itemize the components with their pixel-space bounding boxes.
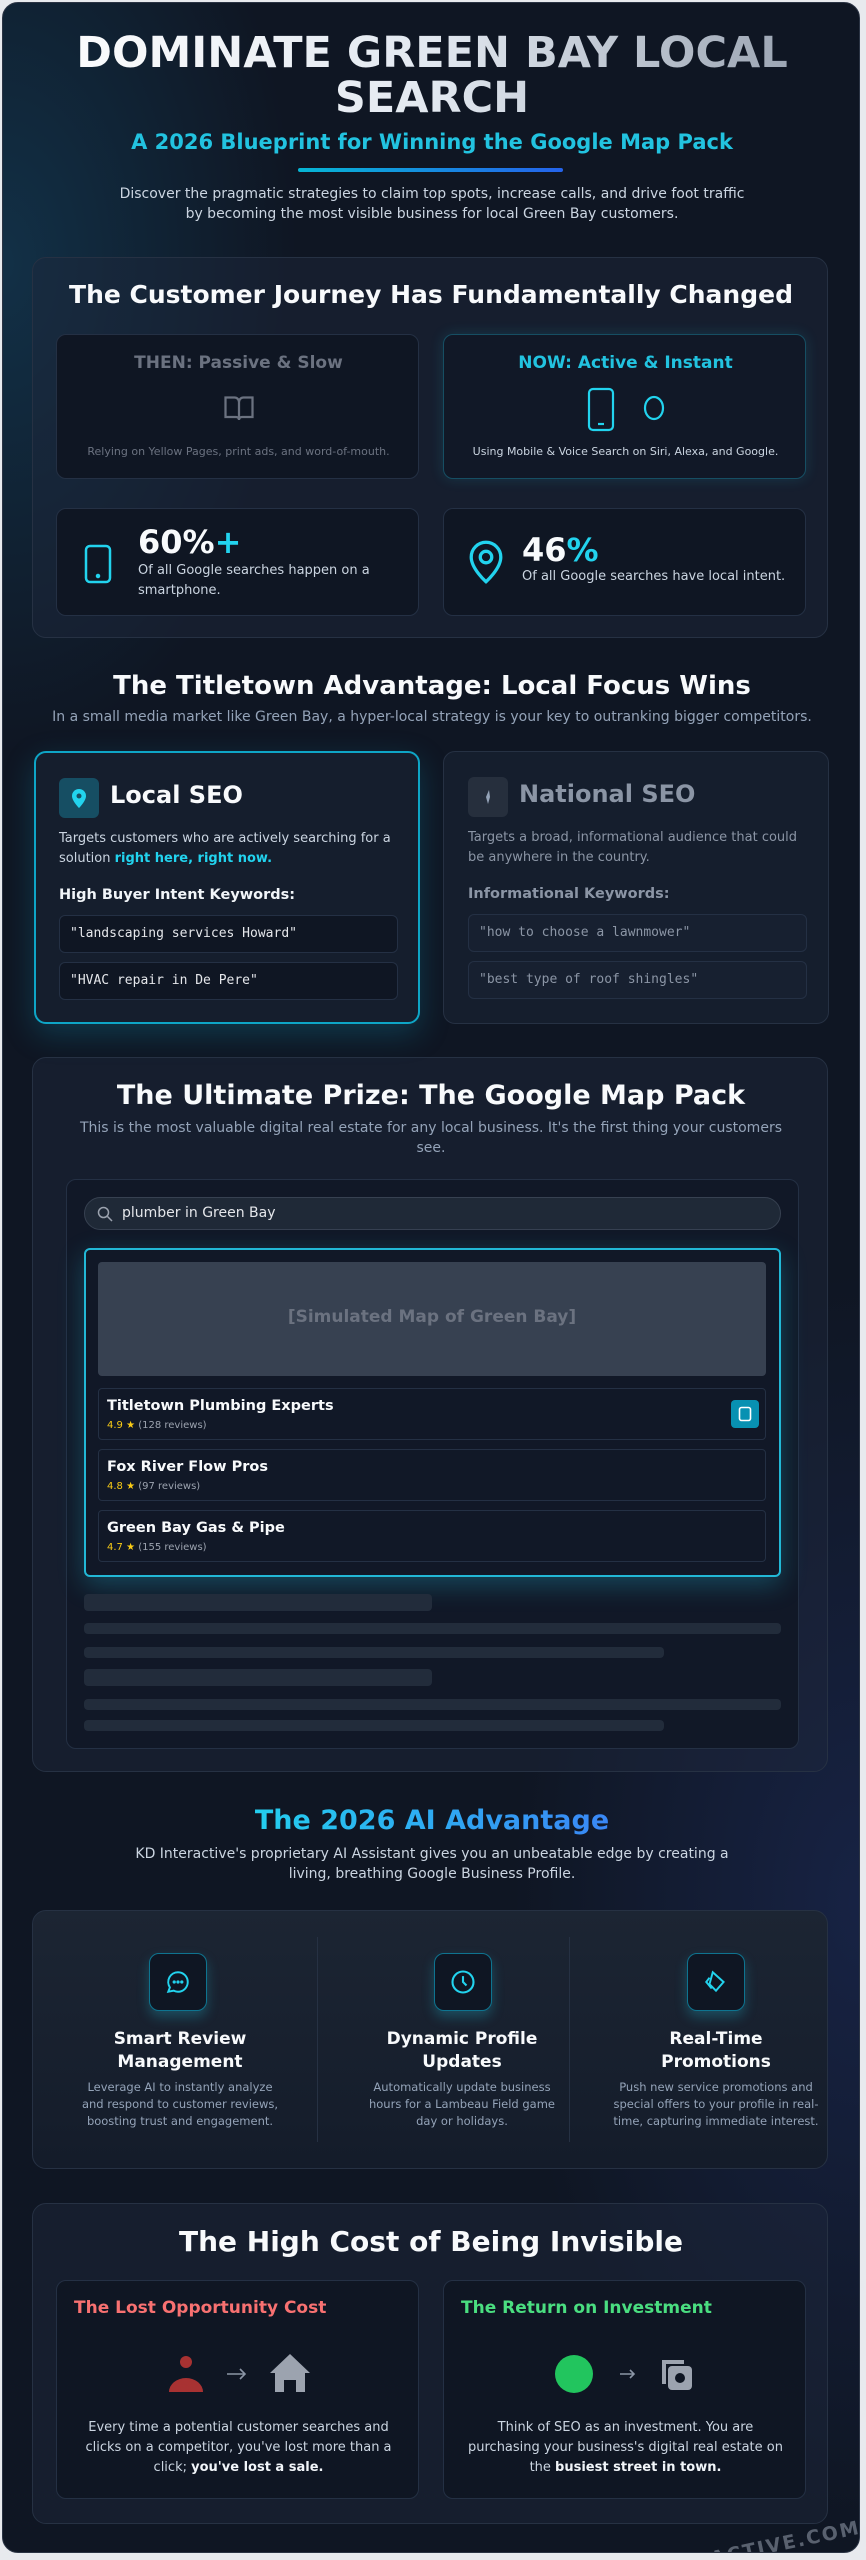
icon: action button (731, 1400, 759, 1428)
mock search results (66, 1179, 799, 1749)
stat: 46%: 46% (522, 531, 599, 569)
panel: map pack (32, 1057, 828, 1772)
card: local seo: Targets customers who are actively searching for a solution right here, right now. (59, 831, 391, 866)
card: local seo: "HVAC repair in De Pere" (70, 973, 258, 988)
listing 3: 4.7 ★ (155 reviews) (107, 1542, 207, 1553)
panel: cost of invisibility (32, 2203, 828, 2524)
panel: customer journey (32, 257, 828, 638)
icon: coin to money (555, 2355, 692, 2393)
stat: 46% (443, 508, 806, 616)
stat: 60%: 60%+ (138, 523, 241, 561)
icon: location pin (470, 540, 502, 584)
gradient underline (298, 168, 563, 172)
listing 2 (98, 1449, 766, 1501)
feature: dynamic profile: Updates (422, 2052, 502, 2072)
subheading: ai (135, 1846, 729, 1882)
feature: dynamic profile: Dynamic Profile (387, 2029, 537, 2049)
icon: pin box (59, 778, 99, 818)
card: roi (443, 2280, 806, 2499)
simulated map (98, 1262, 766, 1376)
subheading: ai: living, breathing Google Business Profile. (289, 1866, 575, 1882)
feature: promotions (613, 1953, 819, 2128)
card: national seo: National SEO (519, 780, 695, 808)
icon: phone and voice (588, 388, 664, 432)
title: DOMINATE GREEN BAY LOCAL (76, 28, 788, 78)
search bar (84, 1197, 781, 1230)
panel: ai features (32, 1910, 828, 2169)
heading: The Ultimate Prize: The Google Map Pack (117, 1080, 745, 1111)
icon: clock (434, 1953, 492, 2011)
card: lost opportunity (56, 2280, 419, 2499)
subheading: titletown: In a small media market like Green Bay, a hyper-local strategy is your key to outranking bigger competitors. (52, 709, 812, 725)
heading: titletown: The Titletown Advantage: Local Focus Wins (113, 671, 751, 701)
title (3, 31, 861, 121)
card: then: THEN: Passive & Slow (134, 353, 343, 373)
heading: The Customer Journey Has Fundamentally Changed (69, 280, 793, 309)
icon: book (224, 396, 254, 420)
feature: dynamic profile (369, 1953, 555, 2128)
subheading: ai: KD Interactive's proprietary AI Assistant gives you an unbeatable edge by creating a (135, 1846, 729, 1862)
listing 1 (98, 1388, 766, 1440)
icon: national box (468, 777, 508, 817)
icon: smartphone (84, 544, 112, 584)
listing 2: Fox River Flow Pros (107, 1459, 268, 1475)
card: lost opportunity: Every time a potential customer searches and clicks on a competitor, you've lost more than a click; you've lost a sale. (85, 2420, 392, 2475)
intro text: by becoming the most visible business for local Green Bay customers. (186, 206, 678, 222)
card: national seo (443, 751, 829, 1024)
feature: smart review: Leverage AI to instantly analyze and respond to customer reviews, boosting trust and engagement. (82, 2080, 278, 2128)
stat: 60%: Of all Google searches happen on a smartphone. (138, 563, 370, 598)
panel: map pack: This is the most valuable digital real estate for any local business. It's the first thing your customers see. (80, 1120, 782, 1156)
feature: smart review (82, 1953, 278, 2128)
feature: dynamic profile: Automatically update business hours for a Lambeau Field game day or holidays. (369, 2080, 555, 2128)
listing 2: 4.8 ★ (97 reviews) (107, 1481, 200, 1492)
card: local seo: High Buyer Intent Keywords: (59, 887, 295, 903)
subtitle: A 2026 Blueprint for Winning the Google Map Pack (131, 130, 733, 154)
feature: promotions: Real-Time (669, 2029, 763, 2049)
card: local seo: Local SEO (110, 781, 243, 809)
card: now (443, 334, 806, 479)
card: lost opportunity: The Lost Opportunity Cost (74, 2298, 326, 2318)
card: national seo: "best type of roof shingles" (479, 972, 698, 987)
listing 3: Green Bay Gas & Pipe (107, 1520, 285, 1536)
feature: smart review: Smart Review (114, 2029, 246, 2049)
simulated map: [Simulated Map of Green Bay] (288, 1307, 576, 1327)
stat: 60% (56, 508, 419, 616)
feature: promotions: Promotions (661, 2052, 771, 2072)
card: national seo: Informational Keywords: (468, 886, 670, 902)
card: then: Relying on Yellow Pages, print ads, and word-of-mouth. (87, 445, 390, 458)
icon: tag (687, 1953, 745, 2011)
map pack box (84, 1248, 781, 1577)
card: local seo (34, 751, 420, 1024)
icon: person to house (169, 2354, 310, 2392)
card: national seo: Targets a broad, informational audience that could be anywhere in the country. (468, 830, 797, 865)
feature: promotions: Push new service promotions and special offers to your profile in real-time, capturing immediate interest. (613, 2080, 819, 2128)
card: local seo: "landscaping services Howard" (70, 926, 297, 941)
card: now: Using Mobile & Voice Search on Siri, Alexa, and Google. (473, 445, 778, 458)
card: now: NOW: Active & Instant (518, 353, 733, 373)
card: then (56, 334, 419, 479)
listing 1: 4.9 ★ (128 reviews) (107, 1420, 207, 1431)
title: SEARCH (335, 73, 529, 123)
stat: 46%: Of all Google searches have local intent. (522, 569, 785, 584)
listing 3 (98, 1510, 766, 1562)
heading: The High Cost of Being Invisible (179, 2225, 683, 2258)
feature: smart review: Management (117, 2052, 243, 2072)
skeleton results (84, 1594, 781, 1731)
search bar: plumber in Green Bay (122, 1205, 276, 1221)
card: roi: Think of SEO as an investment. You are purchasing your business's digital real estate on the busiest street in town. (468, 2420, 783, 2475)
heading: ai advantage: The 2026 AI Advantage (255, 1805, 609, 1836)
card: national seo: "how to choose a lawnmower" (479, 925, 690, 940)
card: roi: The Return on Investment (461, 2298, 712, 2318)
intro text: Discover the pragmatic strategies to claim top spots, increase calls, and drive foot traffic (120, 186, 744, 202)
icon: chat (149, 1953, 207, 2011)
listing 1: Titletown Plumbing Experts (107, 1398, 334, 1414)
intro text (120, 186, 744, 222)
